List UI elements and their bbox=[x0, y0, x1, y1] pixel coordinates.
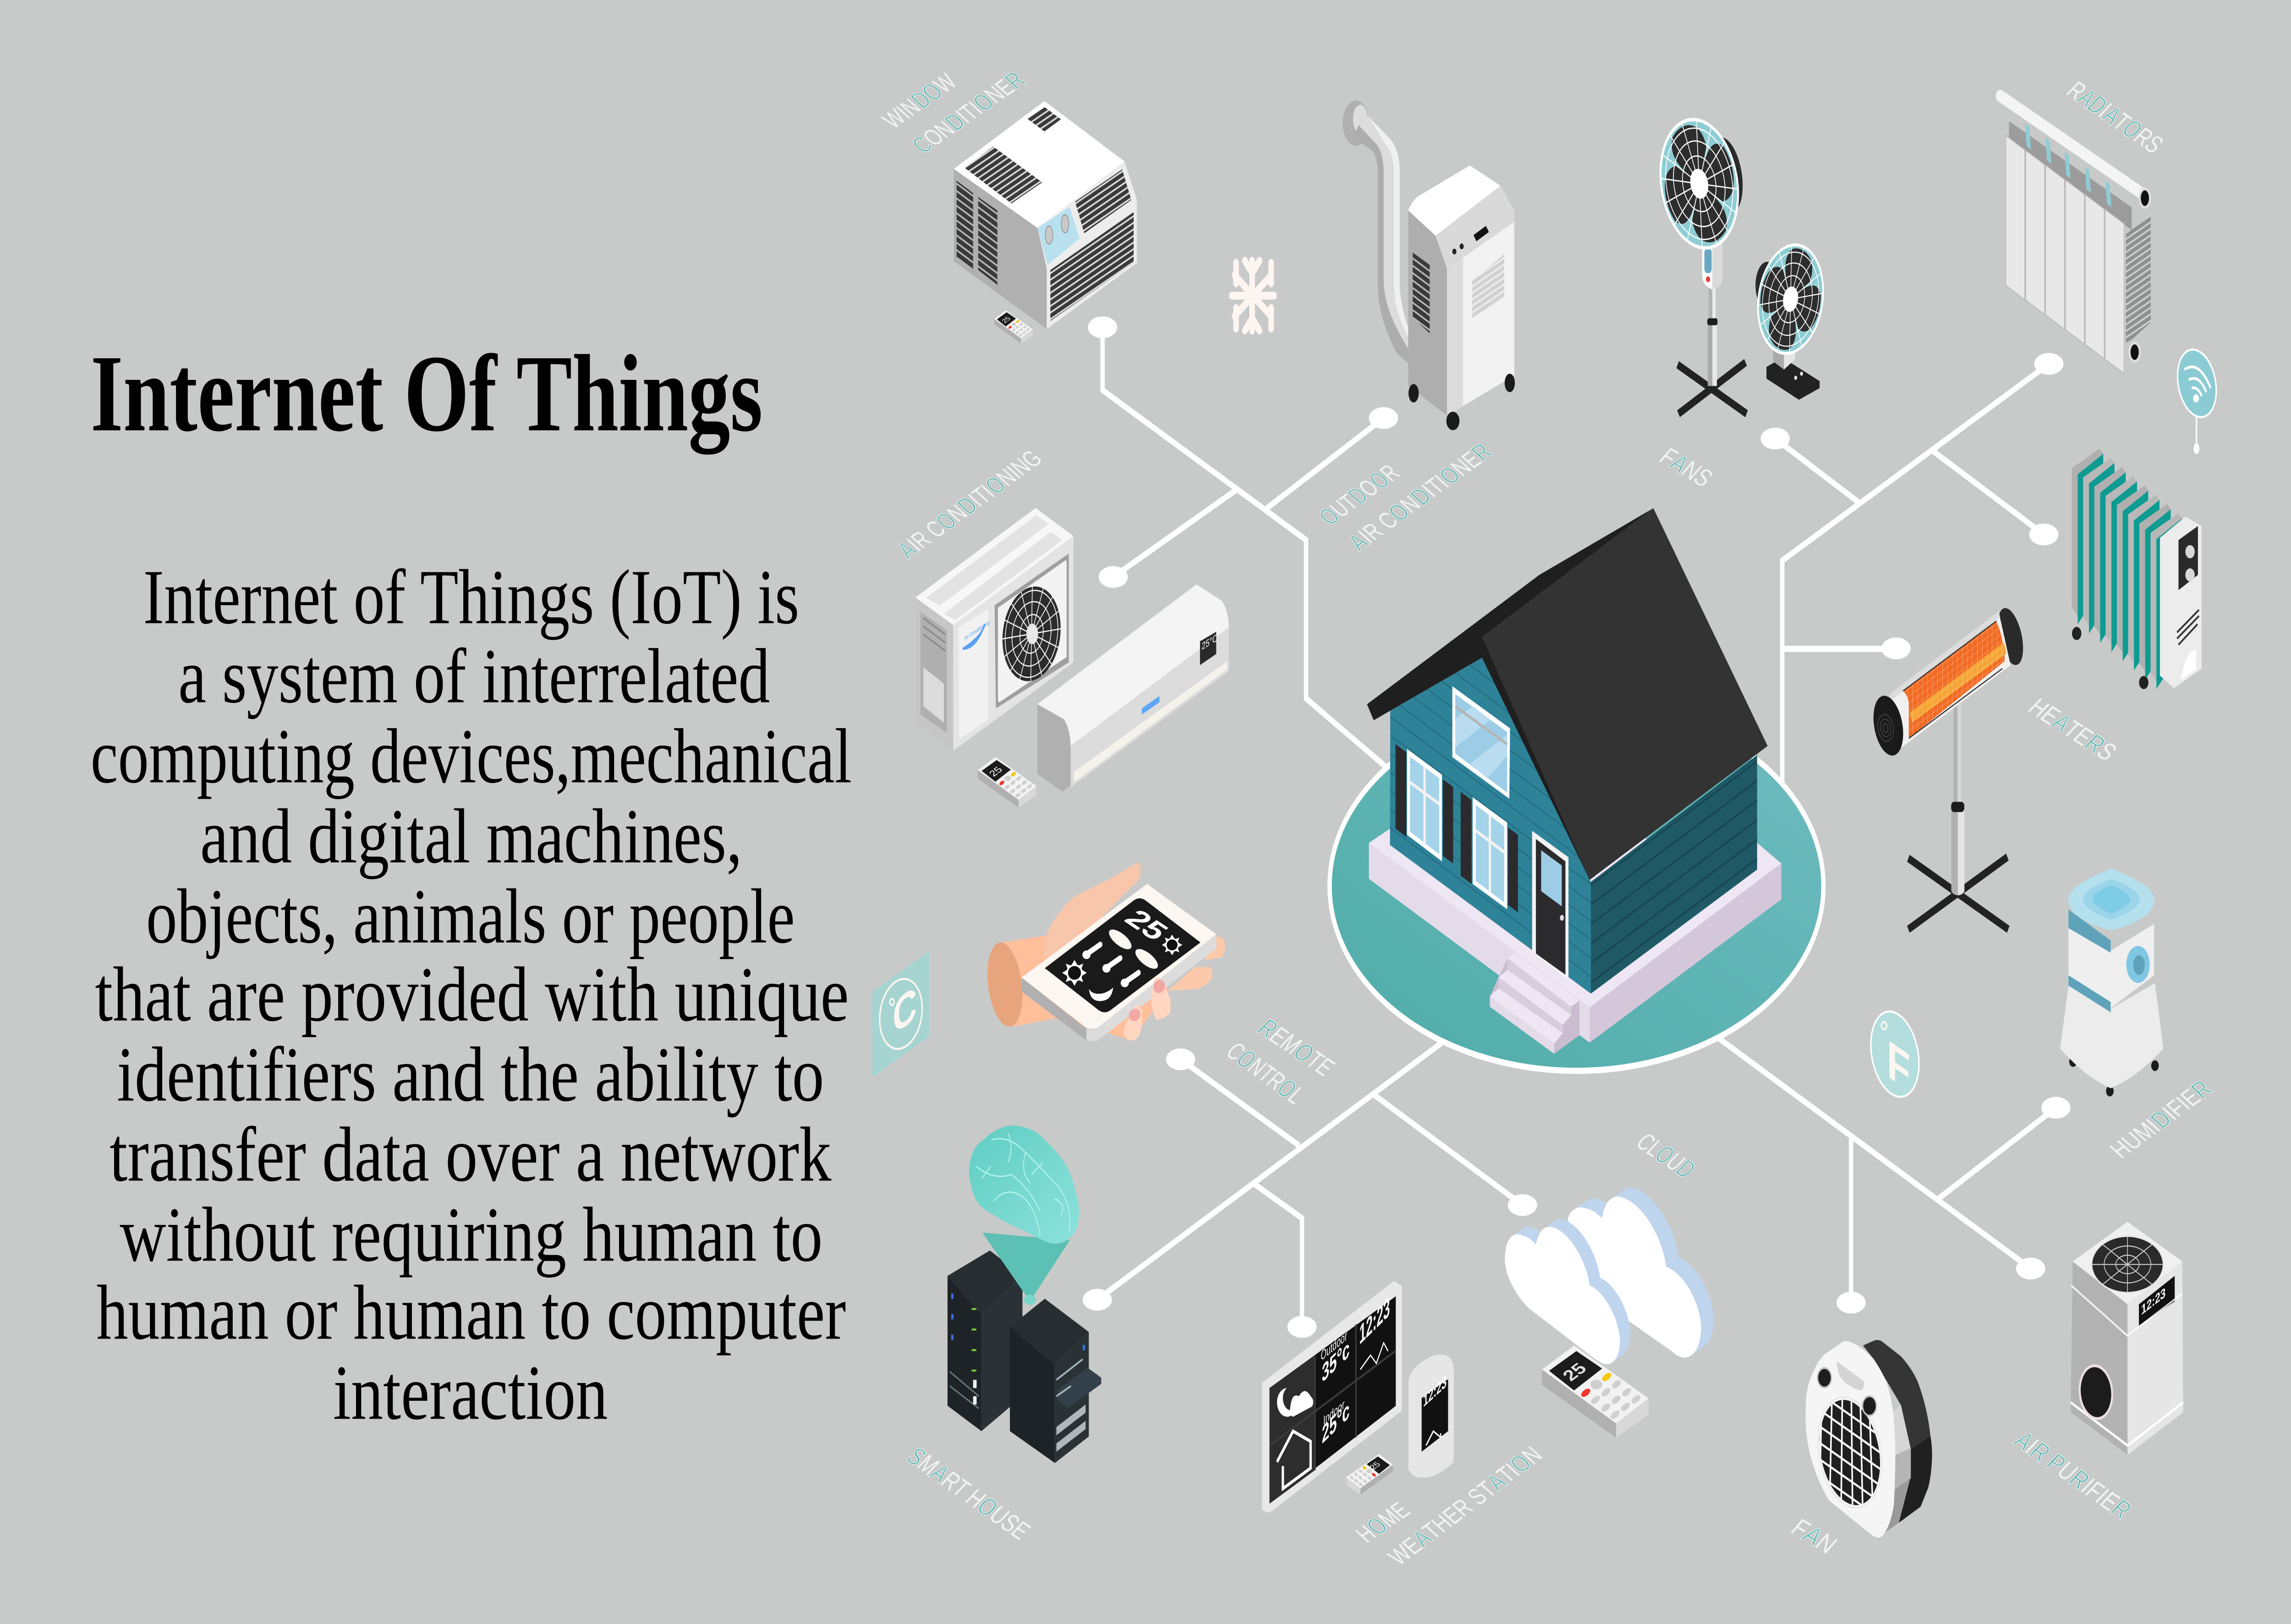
device: air purifier: 12:23 bbox=[2141, 1284, 2165, 1318]
label: remote control bbox=[1221, 1014, 1341, 1109]
weather display bbox=[1262, 1281, 1402, 1513]
label: smart house: SMART HOUSE bbox=[901, 1442, 1036, 1545]
network connector lines bbox=[1097, 326, 2056, 1327]
outdoor unit bbox=[915, 508, 1074, 751]
weather display: 35°c bbox=[1322, 1333, 1349, 1388]
exhaust duct bbox=[1343, 101, 1409, 363]
device: smartphone remote in hand bbox=[982, 863, 1225, 1042]
device: infrared heater on stand bbox=[1869, 604, 2028, 929]
device: oil heater bbox=[2072, 449, 2202, 689]
label: remote control: CONTROL bbox=[1221, 1037, 1311, 1109]
outdoor unit remote bbox=[978, 757, 1036, 808]
label: window conditioner: WINDOW bbox=[876, 68, 963, 133]
weather display: 12:23 bbox=[1359, 1291, 1390, 1351]
label: cloud: CLOUD bbox=[1631, 1128, 1701, 1183]
icon: wifi bbox=[2170, 341, 2223, 454]
description text block: that are provided with unique bbox=[95, 951, 849, 1037]
label: remote control: REMOTE bbox=[1252, 1014, 1341, 1081]
label: outdoor air conditioner: AIR CONDITIONER bbox=[1342, 439, 1498, 555]
bedside station bbox=[1409, 1355, 1454, 1478]
label: window conditioner: CONDITIONER bbox=[906, 67, 1031, 158]
server rack rear bbox=[948, 1251, 1023, 1431]
connector end dots bbox=[1083, 317, 2071, 1338]
outdoor unit: Air Conditioning bbox=[965, 619, 989, 642]
indoor wall unit: 25°C bbox=[1202, 632, 1217, 653]
icon: snowflake bbox=[1232, 261, 1274, 330]
ground floor windows and shutters bbox=[1396, 744, 1518, 912]
device: air purifier bbox=[2071, 1222, 2183, 1455]
device: window conditioner: 25 bbox=[1000, 315, 1012, 324]
description text block: interaction bbox=[333, 1349, 608, 1436]
label: heaters: HEATERS bbox=[2022, 693, 2123, 766]
label: fans: FANS bbox=[1654, 443, 1719, 492]
description text block: transfer data over a network bbox=[110, 1111, 832, 1197]
label: home weather station: HOME bbox=[1349, 1497, 1416, 1547]
device: home weather station bbox=[1262, 1281, 1454, 1513]
entrance stairs bbox=[1490, 953, 1579, 1054]
phone: 25 bbox=[1118, 905, 1175, 945]
icon: fahrenheit tag bbox=[1862, 1001, 1928, 1107]
device: fan heater bbox=[1806, 1340, 1932, 1537]
small remote: 25 bbox=[1368, 1460, 1382, 1471]
front cloud bbox=[1505, 1219, 1631, 1364]
rear cloud bbox=[1568, 1187, 1714, 1358]
roof bbox=[1367, 508, 1768, 880]
description text block: identifiers and the ability to bbox=[117, 1031, 824, 1118]
device: cloud remote: 25 bbox=[1558, 1360, 1591, 1384]
label: outdoor air conditioner: OUTDOOR bbox=[1313, 460, 1405, 530]
bedside station: 12:23 bbox=[1423, 1372, 1447, 1411]
hologram cone bbox=[982, 1233, 1070, 1301]
description text block bbox=[91, 554, 852, 1436]
desk fan bbox=[1748, 232, 1834, 400]
phone bbox=[1022, 884, 1216, 1042]
front door bbox=[1532, 831, 1568, 980]
icon: fahrenheit tag: F bbox=[1887, 1028, 1910, 1104]
device: radiator bbox=[2000, 96, 2151, 374]
standing fan bbox=[1647, 103, 1751, 414]
device: window conditioner bbox=[954, 101, 1137, 344]
device: portable outdoor air conditioner bbox=[1343, 101, 1515, 430]
small remote bbox=[1346, 1454, 1393, 1495]
gable window bbox=[1452, 686, 1510, 799]
device: smart house servers with brain hologram bbox=[948, 1125, 1101, 1463]
label: air conditioning: AIR CONDITIONING bbox=[891, 445, 1048, 563]
indoor wall unit bbox=[1037, 584, 1229, 792]
description text block: without requiring human to bbox=[120, 1191, 822, 1278]
fingers over phone bbox=[1124, 977, 1171, 1041]
hand bbox=[982, 863, 1225, 1041]
house base disc bbox=[1330, 701, 1824, 1071]
description text block: computing devices,mechanical bbox=[91, 713, 852, 799]
description text block: objects, animals or people bbox=[146, 873, 795, 960]
device: cloud bbox=[1505, 1187, 1714, 1364]
label: fan: FAN bbox=[1786, 1514, 1843, 1558]
device: humidifier bbox=[2060, 868, 2163, 1097]
weather display: 25°c bbox=[1322, 1395, 1349, 1449]
description text block: Internet of Things (IoT) is bbox=[143, 554, 799, 640]
title: Internet Of Things bbox=[91, 333, 763, 455]
label: humidifier: HUMIDIFIER bbox=[2104, 1075, 2218, 1163]
brain bbox=[969, 1125, 1079, 1244]
weather display: Outdoor bbox=[1321, 1328, 1347, 1364]
icon: celsius tag bbox=[872, 950, 930, 1078]
description text block: human or human to computer bbox=[96, 1269, 846, 1355]
house walls bbox=[1390, 658, 1757, 993]
description text block: a system of interrelated bbox=[178, 632, 770, 719]
device: cloud remote bbox=[1542, 1345, 1649, 1437]
device: split air conditioning bbox=[915, 508, 1229, 808]
server rack front bbox=[1010, 1299, 1101, 1463]
icon: celsius tag: C bbox=[893, 976, 917, 1045]
foundation bbox=[1369, 828, 1781, 1042]
label: home weather station: WEATHER STATION bbox=[1382, 1441, 1548, 1570]
central smart house bbox=[1330, 508, 1824, 1071]
label: radiators: RADIATORS bbox=[2061, 76, 2169, 159]
description text block: and digital machines, bbox=[200, 793, 742, 879]
label: air purifier: AIR PURIFIER bbox=[2009, 1426, 2138, 1524]
device: fans bbox=[1647, 103, 1834, 414]
outdoor unit remote: 25 bbox=[987, 765, 1005, 779]
weather display: Indoor bbox=[1323, 1397, 1345, 1428]
